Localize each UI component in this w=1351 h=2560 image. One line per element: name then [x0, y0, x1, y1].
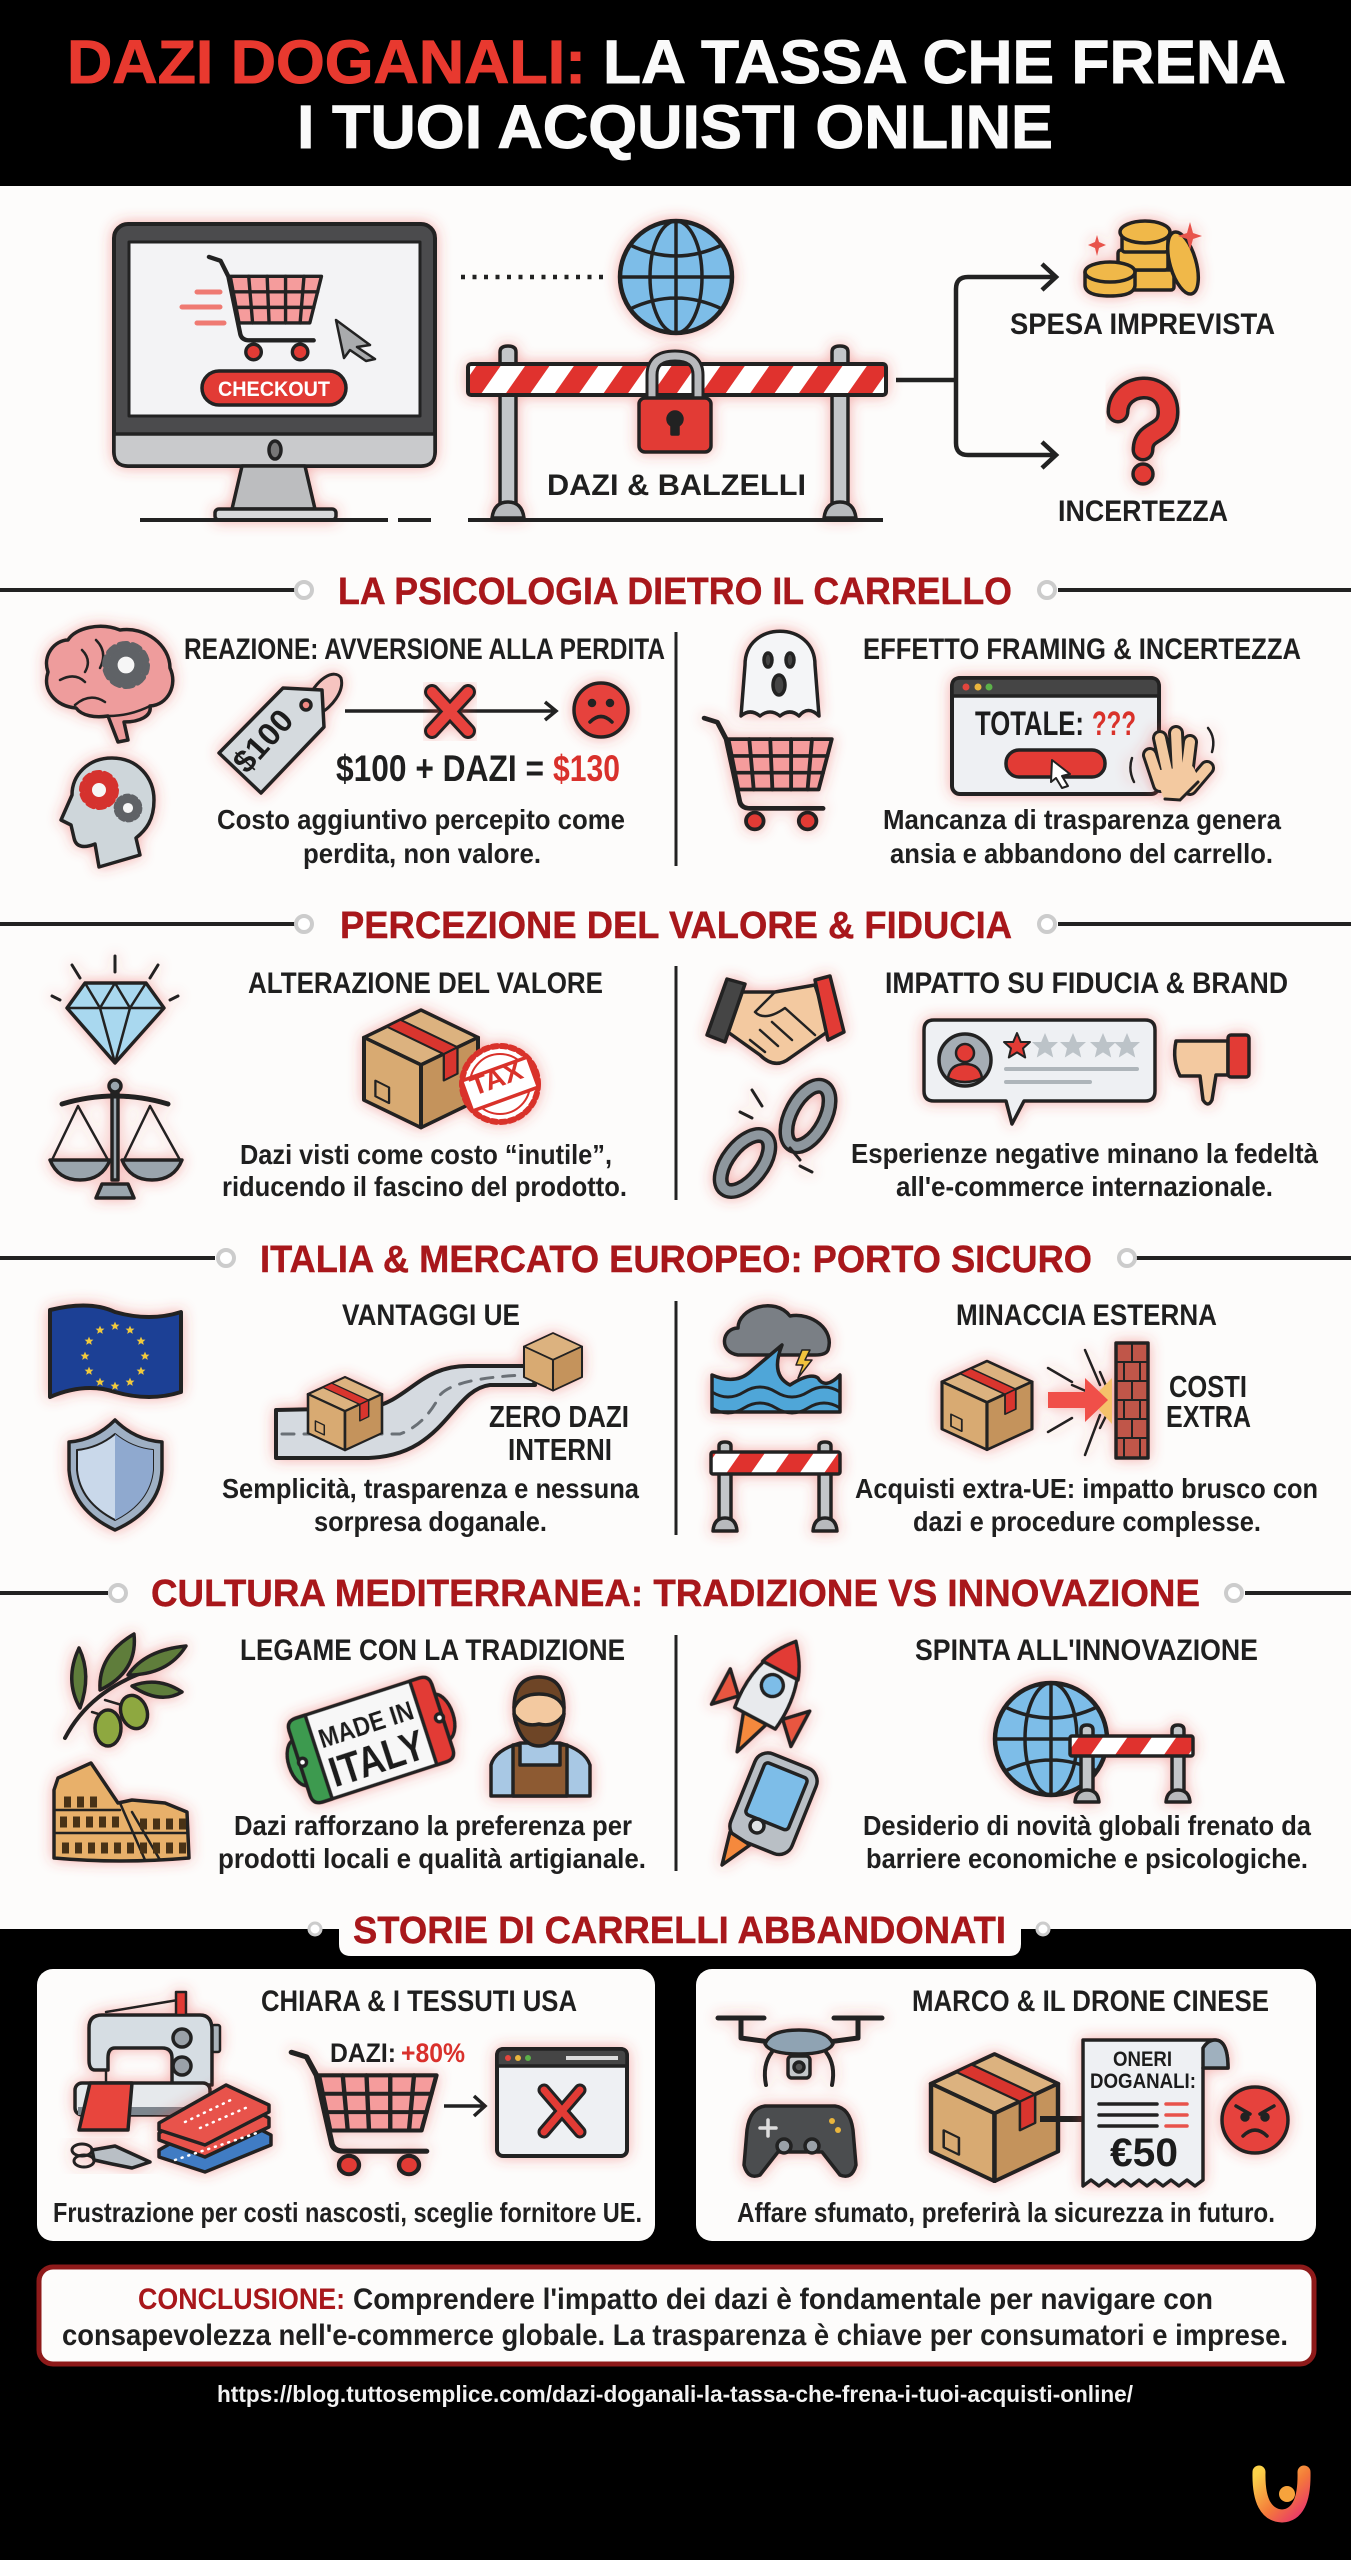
panel: minaccia esterna: [711, 1299, 1318, 1537]
description: Desiderio di novità globali frenato da: [863, 1810, 1311, 1841]
subheading: ALTERAZIONE DEL VALORE: [248, 967, 603, 1000]
icon: logo: [1259, 2472, 1304, 2516]
icon: rocket smartphone: [722, 1749, 821, 1865]
subheading: MINACCIA ESTERNA: [956, 1299, 1217, 1332]
icon: storm and wave: [712, 1306, 840, 1413]
description: all'e-commerce internazionale.: [896, 1171, 1273, 1202]
icon: rocket: [697, 1620, 836, 1773]
icon: computer with checkout: [114, 224, 435, 520]
icon: customs receipt: DOGANALI:: [1090, 2070, 1196, 2093]
conclusion text: CONCLUSIONE:: [138, 2283, 345, 2316]
icon: checkout window: ???: [1092, 705, 1136, 743]
barrier label: DAZI & BALZELLI: [547, 469, 806, 502]
icon: sad face: [574, 683, 628, 737]
icon: thumbs down: [1175, 1035, 1249, 1104]
panel: alterazione del valore: [50, 956, 627, 1202]
icon: small barrier: [711, 1442, 840, 1531]
barrier ground line: [468, 518, 883, 522]
icon: computer with checkout: CHECKOUT: [218, 378, 330, 401]
icon: ghost: [741, 631, 819, 716]
icon: cart: [292, 2052, 436, 2174]
heading: cultura mediterranea: CULTURA MEDITERRANEA: TRADIZIONE VS INNOVAZIONE: [151, 1573, 1200, 1615]
description: Esperienze negative minano la fedeltà: [851, 1138, 1318, 1169]
column divider: [674, 966, 678, 1200]
heading: percezione del valore: PERCEZIONE DEL VALORE & FIDUCIA: [340, 905, 1012, 947]
description: Costo aggiuntivo percepito come: [217, 804, 625, 835]
icon: broken chain: [711, 1079, 839, 1199]
heading: percezione del valore: [0, 905, 1351, 947]
icon: scissors: [72, 2144, 150, 2168]
description: Acquisti extra-UE: impatto brusco con: [855, 1473, 1318, 1504]
icon: question mark: [1118, 388, 1168, 484]
icon: price tag: $100: [225, 702, 300, 780]
icon: checkout window: [952, 678, 1159, 794]
subheading: SPINTA ALL'INNOVAZIONE: [915, 1634, 1258, 1667]
icon: game controller: [744, 2106, 856, 2176]
card background: [696, 1969, 1316, 2241]
icon: handshake: [707, 976, 844, 1063]
icon: error window: [497, 2049, 627, 2156]
subheading: LEGAME CON LA TRADIZIONE: [240, 1634, 625, 1667]
title: [67, 28, 1286, 161]
conclusion text: [62, 2283, 1288, 2352]
price equation: $130: [553, 748, 620, 789]
heading: storie di carrelli abbandonati: STORIE DI CARRELLI ABBANDONATI: [353, 1910, 1006, 1952]
icon: price tag: [219, 674, 342, 793]
panel: vantaggi ue: [50, 1299, 639, 1537]
description: [222, 1139, 627, 1202]
label: duties percentage: [330, 2038, 465, 2068]
icon: globe behind barrier: [995, 1683, 1193, 1802]
description: [851, 1138, 1318, 1202]
icon: parcel with tax stamp: [364, 1010, 538, 1128]
description: [217, 804, 625, 869]
icon: balance scale: [50, 1080, 182, 1198]
label: zero dazi interni: INTERNI: [508, 1432, 612, 1467]
heading: la psicologia: LA PSICOLOGIA DIETRO IL CARRELLO: [338, 571, 1012, 613]
dotted connector: [461, 275, 603, 279]
icon: waving hand: [1130, 728, 1213, 800]
column divider: [674, 632, 678, 866]
price equation: $100 + DAZI =: [336, 748, 544, 789]
icon: coins: [1085, 221, 1204, 297]
icon: shield: [69, 1420, 162, 1530]
icon: checkout window: TOTALE:: [975, 705, 1084, 743]
icon: drone: [718, 2018, 882, 2085]
panel: spinta all'innovazione: [697, 1620, 1311, 1874]
arrow with red cross: [345, 702, 556, 720]
heading: italia e mercato europeo: [0, 1239, 1351, 1281]
heading: la psicologia: [0, 571, 1351, 613]
icon: made in italy tag: ITALY: [323, 1721, 431, 1797]
description: [222, 1473, 639, 1537]
description: [218, 1810, 646, 1874]
icon: brain with gear: [46, 626, 173, 742]
icon: sewing machine: [75, 1992, 220, 2130]
arrow to closed window: [444, 2096, 485, 2116]
subheading: MARCO & IL DRONE CINESE: [912, 1985, 1269, 2018]
icon: road with parcels: [276, 1333, 582, 1458]
icon: olive branch: [65, 1634, 186, 1746]
icon: parcel: [931, 2054, 1058, 2181]
subheading: IMPATTO SU FIDUCIA & BRAND: [885, 967, 1288, 1000]
description: dazi e procedure complesse.: [913, 1506, 1261, 1537]
panel: chiara e i tessuti usa: [37, 1969, 655, 2241]
title: I TUOI ACQUISTI ONLINE: [297, 93, 1053, 161]
title: LA TASSA CHE FRENA: [603, 28, 1286, 96]
subheading: VANTAGGI UE: [342, 1299, 520, 1332]
icon: red cross: [432, 692, 468, 731]
icon: colosseum: [54, 1763, 189, 1861]
label: costi extra: EXTRA: [1166, 1399, 1251, 1434]
icon: parcel hitting wall: [942, 1343, 1148, 1458]
icon: shopping cart: [704, 718, 832, 829]
description: prodotti locali e qualità artigianale.: [218, 1843, 646, 1874]
description: Mancanza di trasparenza genera: [883, 804, 1281, 835]
description: Frustrazione per costi nascosti, sceglie fornitore UE.: [53, 2197, 642, 2228]
heading: italia e mercato europeo: ITALIA & MERCATO EUROPEO: PORTO SICURO: [260, 1239, 1092, 1281]
icon: globe: [620, 221, 732, 333]
icon: parcel with tax stamp: TAX: [466, 1055, 527, 1102]
icon: head with gears: [61, 758, 154, 867]
icon: customs receipt: ONERI: [1113, 2048, 1172, 2071]
icon: customs receipt: €50: [1110, 2131, 1178, 2175]
description: ansia e abbandono del carrello.: [890, 838, 1273, 869]
description: Dazi visti come costo “inutile”,: [240, 1139, 612, 1170]
panel: fiducia e brand: [707, 967, 1318, 1202]
connector: [1040, 2116, 1090, 2122]
branching arrows: [896, 264, 1056, 468]
label: zero dazi interni: ZERO DAZI: [489, 1399, 629, 1434]
label: zero dazi interni: [489, 1399, 629, 1467]
label: costi extra: COSTI: [1169, 1369, 1247, 1404]
description: barriere economiche e psicologiche.: [866, 1843, 1308, 1874]
description: Affare sfumato, preferirà la sicurezza in futuro.: [737, 2197, 1275, 2228]
icon: made in italy tag: [276, 1672, 466, 1808]
panel: conclusione: [39, 2267, 1314, 2364]
ground line under computer: [140, 518, 431, 522]
panel: marco e il drone cinese: [696, 1969, 1316, 2241]
title: DAZI DOGANALI:: [67, 28, 586, 96]
description: sorpresa doganale.: [314, 1506, 547, 1537]
icon: eu flag: [50, 1305, 181, 1397]
label: unexpected expense: SPESA IMPREVISTA: [1010, 308, 1275, 341]
description: Dazi rafforzano la preferenza per: [234, 1810, 632, 1841]
description: perdita, non valore.: [303, 838, 541, 869]
panel: avversione alla perdita: [46, 626, 665, 869]
icon: review bubble: [924, 1020, 1155, 1124]
description: [883, 804, 1281, 869]
panel: legame con la tradizione: [54, 1634, 646, 1874]
card background: [37, 1969, 655, 2241]
label: duties percentage: +80%: [401, 2038, 465, 2068]
label: costi extra: [1166, 1369, 1251, 1434]
panel: effetto framing: [704, 631, 1301, 869]
panel: hero diagram: [114, 221, 1275, 528]
description: Semplicità, trasparenza e nessuna: [222, 1473, 639, 1504]
description: [863, 1810, 1311, 1874]
column divider: [674, 1635, 678, 1871]
icon: fabric stack: [159, 2085, 271, 2172]
white content area: [0, 186, 1351, 1929]
icon: customs receipt: [1083, 2040, 1228, 2186]
icon: diamond: [52, 956, 178, 1063]
icon: made in italy tag: MADE IN: [315, 1695, 417, 1754]
conclusion text: Comprendere l'impatto dei dazi è fondamentale per navigare con: [353, 2283, 1213, 2316]
icon: barrier with padlock: [468, 346, 886, 518]
icon: artisan: [491, 1677, 590, 1796]
label: duties percentage: DAZI:: [330, 2038, 396, 2068]
description: [855, 1473, 1318, 1537]
label: uncertainty: INCERTEZZA: [1058, 495, 1228, 528]
source url: https://blog.tuttosemplice.com/dazi-doganali-la-tassa-che-frena-i-tuoi-acquisti-online/: [217, 2381, 1134, 2407]
subheading: CHIARA & I TESSUTI USA: [261, 1985, 577, 2018]
icon: angry face: [1222, 2087, 1288, 2153]
subheading: REAZIONE: AVVERSIONE ALLA PERDITA: [184, 633, 665, 666]
column divider: [674, 1301, 678, 1535]
description: riducendo il fascino del prodotto.: [222, 1171, 627, 1202]
